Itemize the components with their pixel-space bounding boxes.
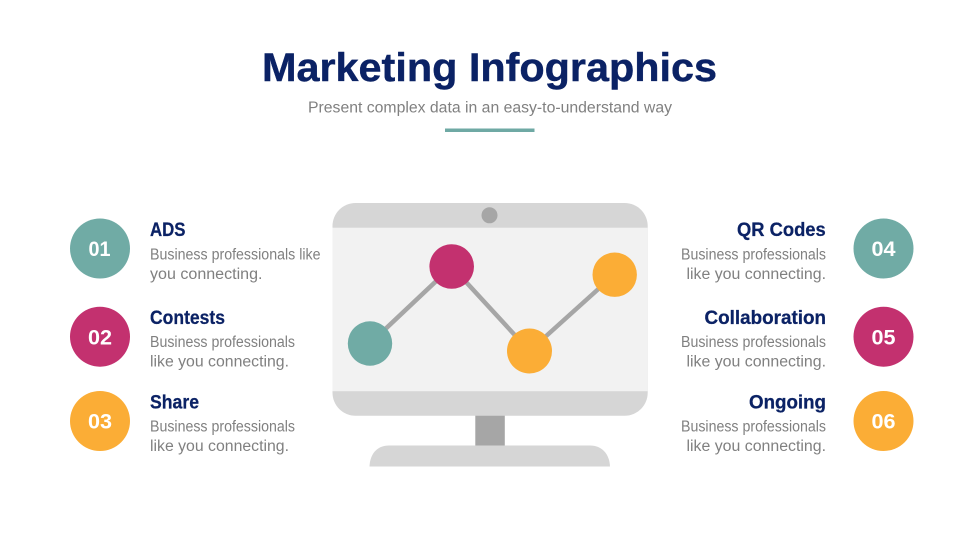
description 01: you connecting.	[150, 266, 262, 283]
monitor stand neck	[475, 415, 505, 446]
description 03: Business professionals	[150, 419, 295, 436]
badge 03: 03	[88, 410, 112, 434]
badge 06	[854, 391, 914, 451]
webcam	[482, 207, 498, 223]
heading Collaboration: Collaboration	[704, 308, 826, 329]
description 03: like you connecting.	[150, 438, 289, 455]
badge 06: 06	[872, 410, 896, 434]
badge 05	[854, 307, 914, 367]
item 03: Share	[70, 391, 295, 455]
description 04: like you connecting.	[686, 266, 826, 283]
chart connecting line	[370, 266, 614, 351]
badge 01: 01	[88, 238, 111, 261]
badge 04	[854, 218, 914, 278]
chart point 3	[507, 328, 552, 374]
chart point 2	[429, 244, 474, 289]
description 02: like you connecting.	[150, 353, 289, 370]
item 05: Collaboration	[681, 307, 914, 370]
description 06: Business professionals	[681, 419, 826, 436]
monitor bezel	[332, 203, 648, 416]
description 02: Business professionals	[150, 334, 295, 351]
heading Contests: Contests	[150, 308, 225, 329]
badge 02	[70, 307, 130, 367]
chart point 4	[592, 253, 637, 297]
heading ADS: ADS	[150, 220, 186, 241]
badge 01	[70, 218, 130, 278]
chart point 1	[348, 321, 392, 366]
title: Marketing Infographics	[262, 46, 717, 90]
item 04: QR Codes	[681, 218, 914, 283]
monitor stand base	[370, 446, 610, 466]
description 05: like you connecting.	[686, 353, 826, 370]
item 01: ADS	[70, 218, 320, 283]
description 05: Business professionals	[681, 334, 826, 351]
badge 02: 02	[88, 326, 112, 349]
badge 03	[70, 391, 130, 451]
subtitle: Present complex data in an easy-to-understand way	[308, 100, 672, 116]
heading Ongoing: Ongoing	[749, 392, 826, 414]
description 04: Business professionals	[681, 246, 826, 263]
description 01: Business professionals like	[150, 246, 320, 263]
heading Share: Share	[150, 392, 199, 414]
badge 04: 04	[872, 238, 896, 261]
badge 05: 05	[872, 326, 896, 349]
item 06: Ongoing	[681, 391, 914, 455]
line chart	[348, 244, 637, 374]
title underline	[445, 128, 534, 132]
monitor screen	[332, 228, 648, 391]
description 06: like you connecting.	[686, 438, 826, 455]
heading QR Codes: QR Codes	[737, 220, 826, 241]
monitor with line chart	[332, 203, 648, 466]
item 02: Contests	[70, 307, 295, 370]
